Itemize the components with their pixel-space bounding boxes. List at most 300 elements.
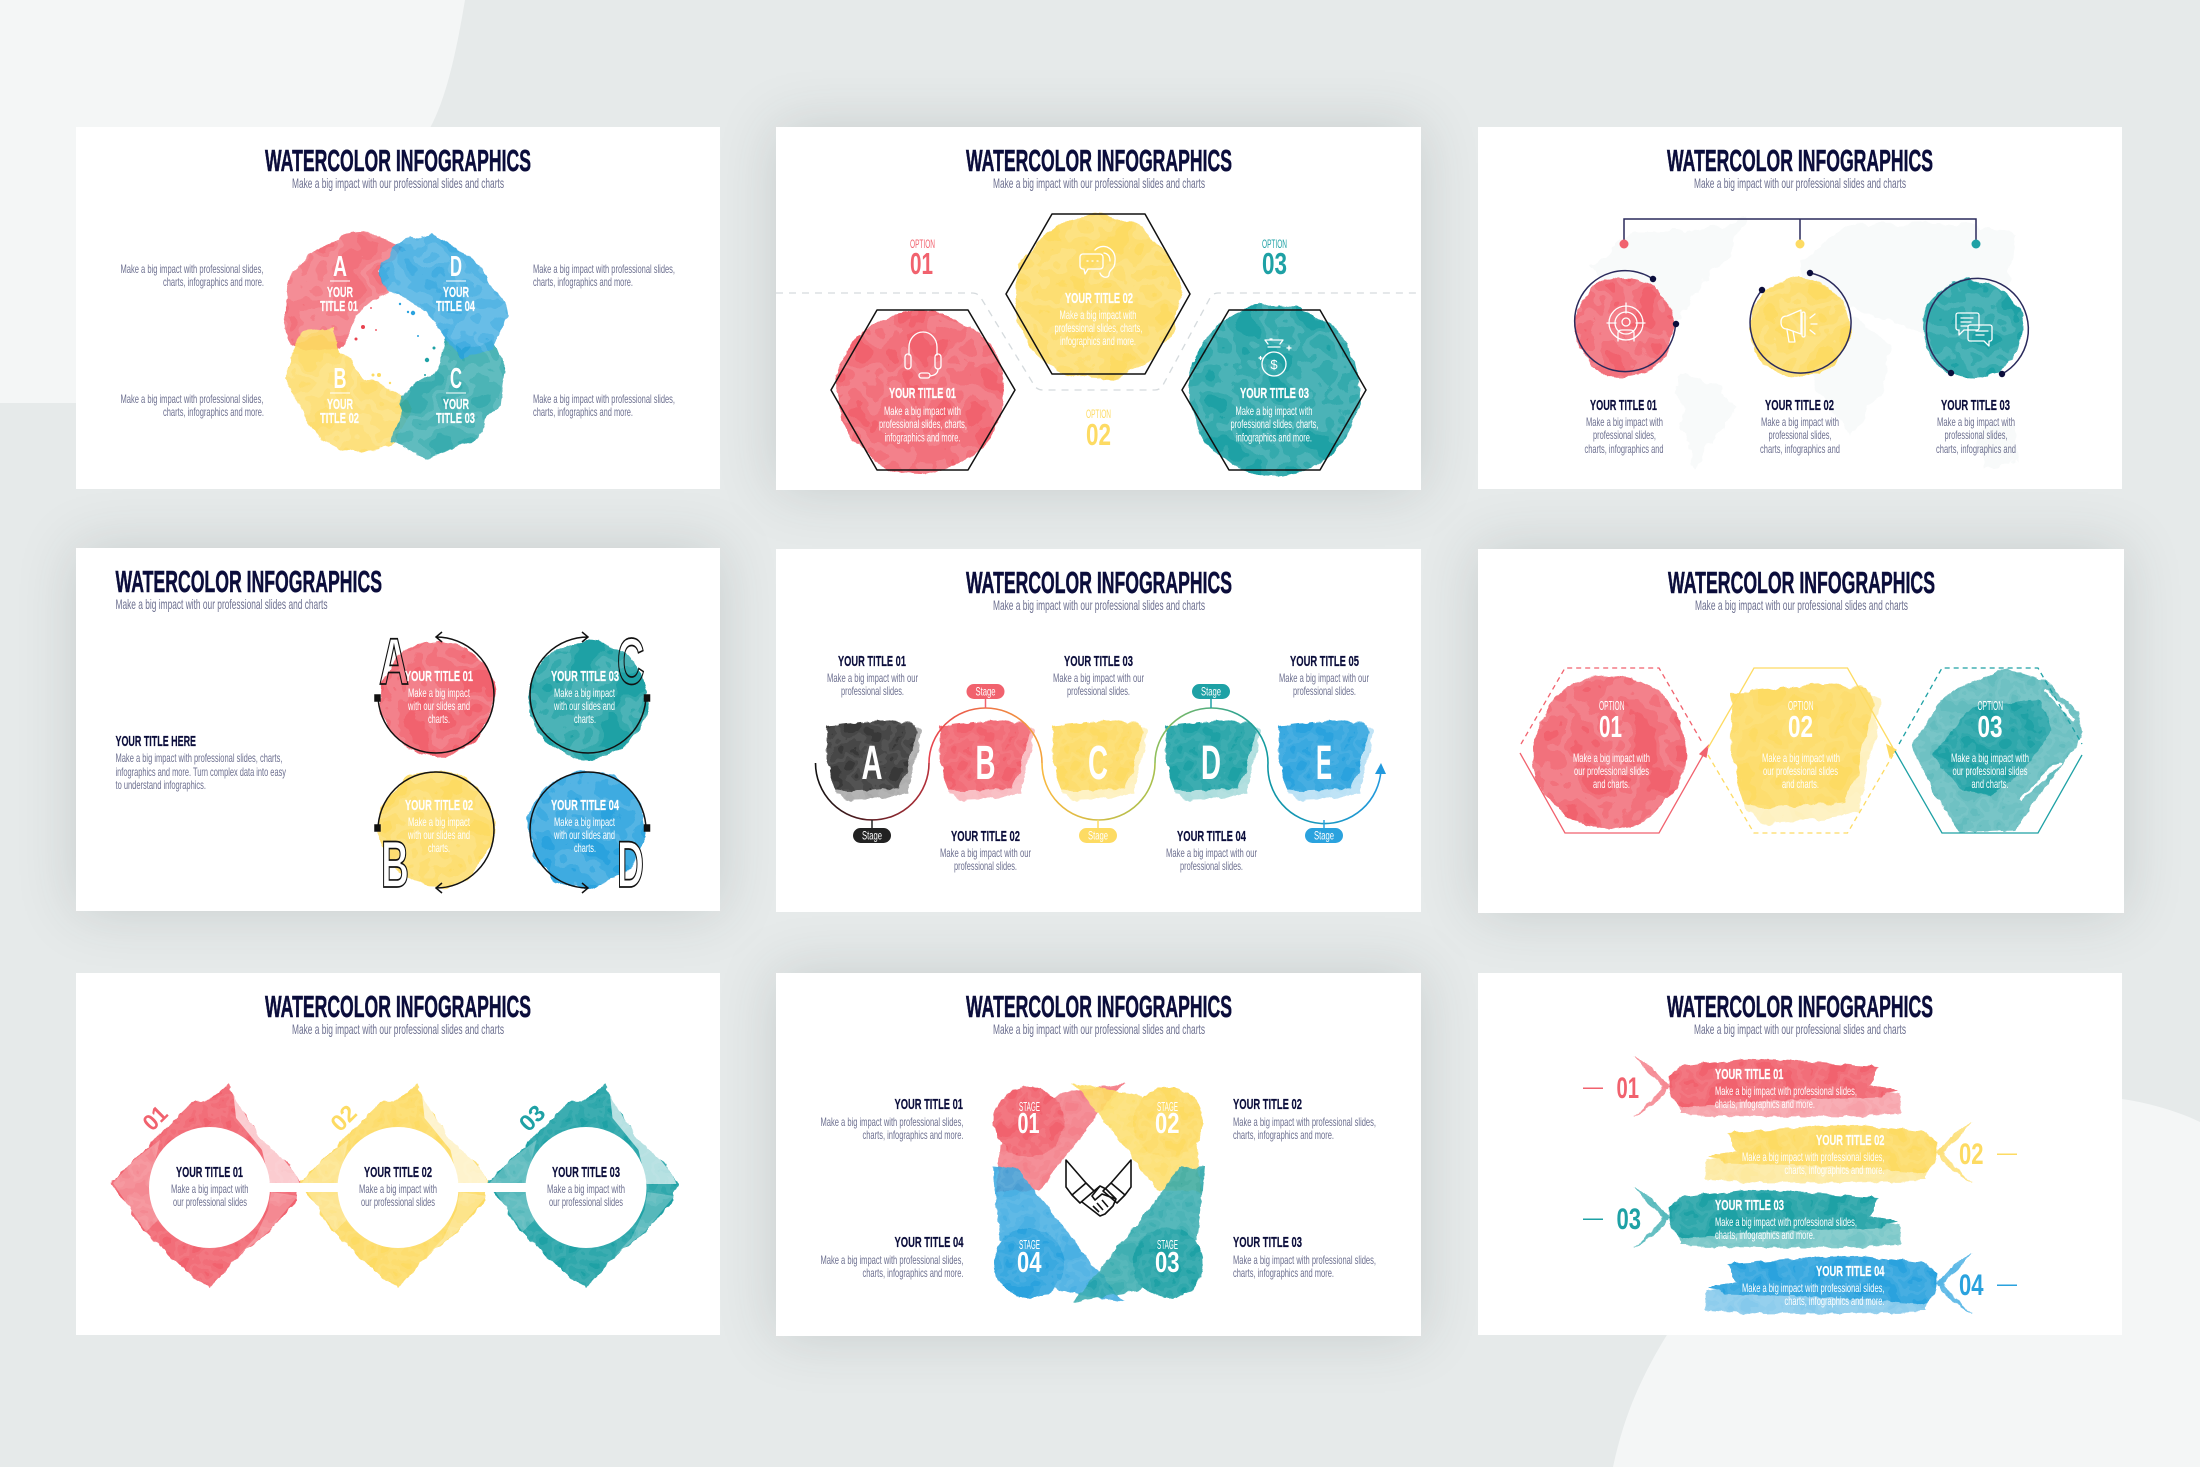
text in yellow banner [1742,1132,1884,1177]
option 03: 03 [1262,246,1287,281]
text in red hexagon [879,385,967,444]
text in red banner [1715,1066,1857,1111]
subtitle: Make a big impact with our professional slides and charts [993,597,1205,613]
option 01 [910,237,935,281]
text block 05: YOUR TITLE 05 [1290,653,1359,670]
text block lower right: Make a big impact with professional slides, [533,392,675,406]
text in red blob: our professional slides [1574,764,1649,778]
icon: money bag: $ [1270,357,1278,372]
petal: teal [392,338,505,457]
subtitle: Make a big impact with our professional slides and charts [116,596,328,612]
stage 04 [1017,1238,1042,1279]
text in yellow blob: our professional slides [1763,764,1838,778]
text block 02: our professional slides [361,1195,435,1209]
text block: your title here: YOUR TITLE HERE [116,733,196,750]
title: WATERCOLOR INFOGRAPHICS [265,989,531,1024]
icon: megaphone [1781,310,1817,342]
wave arrow [816,708,1386,824]
text in teal banner [1715,1197,1857,1242]
text block 04: Make a big impact with our [1166,846,1257,860]
outlined letters: C [617,624,644,698]
stage pill C [1079,820,1117,843]
petal label A: YOUR [327,284,353,301]
text block upper left [120,262,264,289]
stage pill E: Stage [1314,828,1334,842]
text block 01 [827,653,918,698]
text in yellow blob [1762,699,1840,791]
text block lower right [533,392,675,419]
text in yellow circle: Make a big impact [408,815,470,829]
circle teal [1923,278,2028,379]
text in teal blob [1951,699,2029,791]
text block 04 [820,1234,964,1280]
text block 04 [1166,828,1257,873]
text in red hexagon: professional slides, charts, [879,417,967,431]
text in yellow blob: Make a big impact with [1762,751,1840,765]
text block 03: our professional slides [549,1195,623,1209]
hexagon red arrows [1520,668,1708,833]
text block 03: charts, infographics and [1936,442,2016,456]
brush square B [939,720,1034,800]
petal: yellow [283,328,412,454]
stage 01 [1018,1100,1040,1140]
text block 05: professional slides. [1293,684,1356,698]
text block 03 [1053,653,1144,698]
text in teal hexagon: Make a big impact with [1236,404,1312,418]
text in teal hexagon: YOUR TITLE 03 [1240,385,1309,402]
text block 01 [820,1096,964,1142]
text block 03: Make a big impact with [547,1182,625,1196]
text in teal blob: 03 [1978,709,2002,744]
number 02: 02 [1959,1138,1984,1171]
brush banner red [1633,1057,1901,1118]
brush teal [1073,1166,1205,1302]
text in teal blob: and charts. [1972,777,2008,791]
text block: your title here [116,733,286,792]
text block 01: charts, infographics and [1584,442,1664,456]
icon: handshake [1066,1160,1131,1216]
hexagon teal arrows [1895,668,2082,833]
petal label C: TITLE 03 [436,410,475,427]
text block 04: professional slides. [1180,859,1243,873]
text in teal blob: OPTION [1978,699,2003,713]
watercolor blob teal [1189,304,1359,476]
rotated number 02: 02 [325,1100,362,1136]
diamond ring teal [488,1084,678,1288]
text in teal circle: charts. [574,712,596,726]
subtitle: Make a big impact with our professional slides and charts [993,175,1205,191]
text in yellow circle: with our slides and [407,828,470,842]
petal label B: TITLE 02 [320,410,359,427]
petal label B [320,363,359,427]
circle yellow [1750,270,1851,377]
text in red hexagon: Make a big impact with [884,404,961,418]
brush banner yellow [1705,1123,1973,1184]
panel: three hexagon cycle [1478,549,2124,913]
watercolor blob yellow [1014,215,1180,379]
text block 02: Make a big impact with our [940,846,1031,860]
arrow ring teal [530,632,650,753]
stage 03: STAGE [1157,1238,1178,1252]
title: WATERCOLOR INFOGRAPHICS [966,989,1232,1024]
option 02 [1086,407,1111,452]
text block 04: Make a big impact with professional slides, [820,1253,964,1267]
text block 02 [1760,397,1840,456]
text block 03: Make a big impact with our [1053,671,1144,685]
arrow ring blue [530,772,650,893]
title: WATERCOLOR INFOGRAPHICS [1667,143,1933,178]
world map [1590,218,2018,470]
petal label D [436,251,475,315]
stage pill D [1192,684,1230,708]
blob red [380,641,494,755]
text block 05 [1279,653,1369,698]
stage 04: STAGE [1019,1238,1040,1252]
text in red circle: Make a big impact [408,686,470,700]
text in yellow blob: and charts. [1782,777,1819,791]
option 03 [1262,237,1287,281]
text in red blob: and charts. [1593,777,1630,791]
icon: chat bubbles [1956,313,1992,346]
text block 02: Make a big impact with [1761,415,1839,429]
number 03: 03 [1616,1203,1641,1236]
title: WATERCOLOR INFOGRAPHICS [1667,989,1933,1024]
text block 01 [171,1164,248,1209]
text block 02: professional slides, [1768,428,1832,442]
outlined letters: A [379,624,409,698]
connecting white bars [268,1183,528,1192]
text block upper right [533,262,675,289]
subtitle: Make a big impact with our professional slides and charts [1694,1021,1906,1037]
text block 01: YOUR TITLE 01 [894,1096,963,1113]
letters: A [862,737,882,790]
subtitle: Make a big impact with our professional slides and charts [292,1021,504,1037]
outlined letters: D [617,827,644,901]
panel: wave process: E [1316,737,1332,790]
stage pill A: Stage [862,828,882,842]
text in yellow blob: 02 [1788,709,1813,744]
stage pill B [966,684,1004,708]
text in teal banner: Make a big impact with professional slides, [1715,1215,1857,1229]
text block 03 [547,1164,625,1209]
number 04 [1959,1269,2017,1302]
petal label A: TITLE 01 [320,298,358,315]
text block 01: our professional slides [173,1195,247,1209]
petal label C: YOUR [443,396,469,413]
text block 03: Make a big impact with professional slides, [1233,1253,1376,1267]
text in red circle: with our slides and [407,699,470,713]
text block 03: Make a big impact with [1937,415,2015,429]
text block 03: YOUR TITLE 03 [1233,1234,1302,1251]
text block lower left [120,392,264,419]
stage pill A [853,820,891,843]
title: WATERCOLOR INFOGRAPHICS [966,143,1232,178]
petal label A: A [333,251,347,283]
text block 02: Make a big impact with [359,1182,437,1196]
text in blue circle: YOUR TITLE 04 [551,797,619,814]
text in teal circle: with our slides and [553,699,615,713]
text block upper right: Make a big impact with professional slides, [533,262,675,276]
text in yellow hexagon: YOUR TITLE 02 [1065,290,1133,307]
blob blue [528,771,644,887]
blob yellow [1730,683,1880,823]
petal label A [320,251,358,315]
petal: blue [378,233,508,360]
petal label D: YOUR [443,284,469,301]
rotated number 03: 03 [514,1100,550,1136]
text in red circle: charts. [428,712,450,726]
stage pill D: Stage [1201,684,1221,698]
text block 02 [1233,1096,1376,1142]
number 01 [1583,1072,1639,1105]
letters: C [1088,737,1108,790]
brush blue [992,1166,1124,1302]
brush banner blue [1705,1254,1973,1315]
blob red [1534,675,1686,829]
text in yellow banner: charts, infographics and more. [1784,1163,1884,1177]
stage 02 [1155,1100,1180,1140]
icon: chat and ear [1080,246,1115,277]
text block 04: YOUR TITLE 04 [894,1234,964,1251]
option 02: OPTION [1086,407,1111,421]
stage 02: 02 [1155,1108,1180,1140]
hexagon outline right [1182,310,1366,470]
outlined letters [379,624,644,901]
text in teal blob: Make a big impact with [1951,751,2029,765]
letters: B [976,737,996,790]
brush square E [1278,720,1373,800]
subtitle: Make a big impact with our professional slides and charts [1695,597,1908,613]
text block 05: Make a big impact with our [1279,671,1369,685]
title: WATERCOLOR INFOGRAPHICS [265,143,531,178]
text in red blob [1573,699,1650,791]
blob teal brush [1912,664,2085,832]
text block 01 [1584,397,1664,456]
diamond ring red [112,1084,301,1288]
stage pill C: Stage [1088,828,1108,842]
petal label D: D [450,251,462,283]
text block 02 [940,828,1031,873]
text in teal circle: YOUR TITLE 03 [551,668,619,685]
panel: diamond rings [76,973,720,1335]
letters: D [1201,737,1221,790]
blob yellow [378,770,494,886]
stage pill E [1305,820,1343,843]
stage 03: 03 [1155,1247,1180,1279]
connector bracket [1624,219,1976,240]
text in red banner: Make a big impact with professional slides, [1715,1084,1857,1098]
text in red circle: YOUR TITLE 01 [405,668,473,685]
text block 01: YOUR TITLE 01 [1590,397,1657,414]
hexagon yellow arrows [1708,668,1896,833]
text in red hexagon: YOUR TITLE 01 [889,385,956,402]
stage 01: STAGE [1019,1100,1040,1114]
stage 03 [1155,1238,1180,1279]
text block 01: YOUR TITLE 01 [176,1164,243,1181]
text block 02: YOUR TITLE 02 [1233,1096,1302,1113]
text block 04: YOUR TITLE 04 [1177,828,1246,845]
text block 03 [1233,1234,1376,1280]
text in blue banner: YOUR TITLE 04 [1816,1263,1885,1280]
splatter dots [354,303,436,384]
text in red hexagon: infographics and more. [884,430,960,444]
brush yellow [1073,1083,1203,1192]
option 02: 02 [1086,417,1111,452]
text block 03: professional slides, [1944,428,2008,442]
hexagon outline left [831,310,1015,470]
text block 01: Make a big impact with [1586,415,1663,429]
petal label C: C [450,363,462,395]
text block 03: YOUR TITLE 03 [1941,397,2010,414]
title: WATERCOLOR INFOGRAPHICS [1668,565,1935,600]
text in red blob: 01 [1599,709,1622,744]
text block 01: professional slides. [841,684,904,698]
text block 03: YOUR TITLE 03 [1064,653,1133,670]
text in yellow circle: YOUR TITLE 02 [405,797,473,814]
panel: brush banners [1478,973,2122,1335]
text in blue circle: charts. [574,841,596,855]
circle red [1574,271,1679,378]
rotated number 01: 01 [137,1100,173,1136]
blob teal [529,641,647,759]
text block 02: YOUR TITLE 02 [364,1164,432,1181]
text block 01: Make a big impact with professional slides, [820,1115,964,1129]
text in red blob: Make a big impact with [1573,751,1650,765]
text block 02: charts, infographics and more. [1233,1128,1334,1142]
text block 04: charts, infographics and more. [862,1266,964,1280]
title: WATERCOLOR INFOGRAPHICS [116,564,382,599]
text block 02: Make a big impact with professional slides, [1233,1115,1376,1129]
text block: your title here: to understand infographics. [116,778,206,792]
text in yellow circle: charts. [428,841,450,855]
petal label D: TITLE 04 [436,298,475,315]
text in yellow hexagon: infographics and more. [1060,334,1136,348]
text block upper left: Make a big impact with professional slides, [120,262,264,276]
stage 02: STAGE [1157,1100,1178,1114]
option 03: OPTION [1262,237,1287,251]
text in yellow blob: OPTION [1788,699,1814,713]
subtitle: Make a big impact with our professional slides and charts [1694,175,1906,191]
text in red circle [405,668,473,726]
text in yellow hexagon: Make a big impact with [1060,308,1136,322]
brush square D [1165,720,1260,800]
text block 01: Make a big impact with [171,1182,248,1196]
text block 02 [359,1164,437,1209]
brush square A [826,720,921,800]
text in blue circle [551,797,619,855]
text in teal hexagon: professional slides, charts, [1230,417,1318,431]
text in teal circle [551,668,619,726]
petal label B: B [334,363,346,395]
text block 01: professional slides, [1593,428,1656,442]
text block lower right: charts, infographics and more. [533,405,633,419]
text in yellow banner: Make a big impact with professional slides, [1742,1150,1884,1164]
text in yellow hexagon [1054,290,1142,348]
text block upper right: charts, infographics and more. [533,275,633,289]
number 01: 01 [1616,1072,1639,1105]
icon: target person [1607,303,1645,341]
text in teal banner: charts, infographics and more. [1715,1228,1815,1242]
petal: red [285,232,402,352]
number 03 [1583,1203,1641,1236]
text in teal circle: Make a big impact [554,686,615,700]
text in red blob: OPTION [1599,699,1624,713]
petal label C [436,363,475,427]
number 04: 04 [1959,1269,1984,1302]
stage 04: 04 [1017,1247,1042,1279]
text in blue banner: Make a big impact with professional slides, [1742,1281,1884,1295]
text in red banner: YOUR TITLE 01 [1715,1066,1784,1083]
text in teal banner: YOUR TITLE 03 [1715,1197,1784,1214]
text in yellow circle [405,797,473,855]
text block 02: YOUR TITLE 02 [1765,397,1834,414]
panel: hexagon options [776,127,1421,490]
diamond ring yellow [300,1084,490,1288]
text in teal hexagon: infographics and more. [1236,430,1312,444]
text in teal blob: our professional slides [1952,764,2028,778]
text in teal hexagon [1230,385,1318,444]
text block lower left: Make a big impact with professional slides, [120,392,264,406]
icon: headset [905,332,941,378]
text block lower left: charts, infographics and more. [163,405,264,419]
title: WATERCOLOR INFOGRAPHICS [966,565,1232,600]
icon: money bag [1259,339,1291,376]
panel: four petal cycle [76,127,720,489]
text block 03: professional slides. [1067,684,1130,698]
option 01: OPTION [910,237,935,251]
text in red banner: charts, infographics and more. [1715,1097,1815,1111]
panel: wave process [776,549,1421,912]
connector dots [1620,240,1980,248]
hexagon outline middle [1006,214,1190,374]
brush square C [1052,720,1147,800]
text block: your title here: infographics and more. Turn complex data into easy [116,765,286,779]
arrow ring red [375,632,494,753]
text in blue circle: with our slides and [553,828,615,842]
panel: world map circles [1478,127,2122,489]
text block 03 [1936,397,2016,456]
text in blue banner: charts, infographics and more. [1784,1294,1884,1308]
text block: your title here: Make a big impact with professional slides, charts, [116,751,282,765]
stage pill B: Stage [976,684,996,698]
text block 02: professional slides. [954,859,1017,873]
subtitle: Make a big impact with our professional slides and charts [993,1021,1205,1037]
text block 02: charts, infographics and [1760,442,1840,456]
letters [862,737,1332,790]
brush banner teal [1633,1188,1901,1249]
text in blue banner [1742,1263,1885,1308]
text block 02: YOUR TITLE 02 [951,828,1020,845]
text in yellow hexagon: professional slides, charts, [1054,321,1142,335]
stage 01: 01 [1018,1108,1040,1140]
text block upper left: charts, infographics and more. [163,275,264,289]
text block 03: YOUR TITLE 03 [552,1164,620,1181]
text block 03: charts, infographics and more. [1233,1266,1334,1280]
text in blue circle: Make a big impact [554,815,615,829]
panel: ABCD circles [76,548,720,911]
text block 01: YOUR TITLE 01 [838,653,906,670]
brush red [994,1083,1124,1192]
subtitle: Make a big impact with our professional slides and charts [292,175,504,191]
text block 01: Make a big impact with our [827,671,918,685]
watercolor blob red [836,310,1004,474]
outlined letters: B [381,827,409,901]
option 01: 01 [910,246,933,281]
text block 01: charts, infographics and more. [862,1128,964,1142]
arrow ring yellow [375,772,494,893]
petal label B: YOUR [327,396,353,413]
number 02 [1959,1138,2017,1171]
